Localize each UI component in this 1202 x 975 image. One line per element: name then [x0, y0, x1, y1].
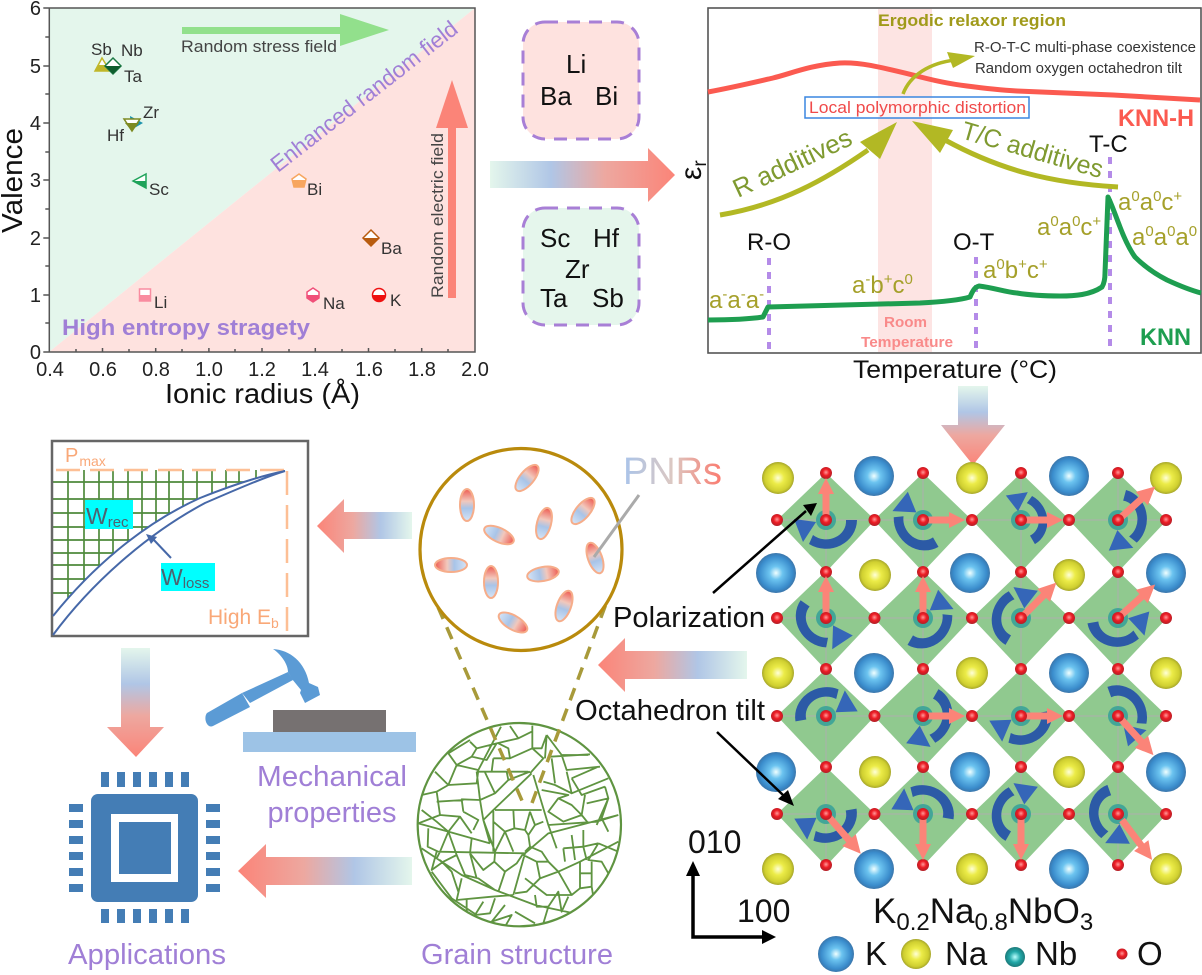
arrow: Wloss pointer — [146, 534, 171, 558]
note: multi-phase coexistence: R-O-T-C multi-phase coexistence — [974, 39, 1196, 56]
element labels — [91, 40, 402, 313]
label: high Eb: High E — [208, 606, 271, 629]
label: KNN: KNN — [1140, 324, 1191, 351]
label: Wloss: loss — [183, 575, 209, 592]
box: B-site additives: Ta — [540, 283, 568, 313]
Glazer tilt notation labels: - — [722, 286, 727, 303]
Glazer tilt notation labels: c — [1027, 257, 1039, 284]
Glazer tilt notation labels: - — [741, 286, 746, 303]
formula: K0.2Na0.8NbO3: NbO — [1008, 892, 1080, 931]
label: polarization: Polarization — [613, 602, 765, 634]
label: Wloss: W — [161, 564, 183, 590]
y axis tick labels: 5 — [30, 56, 41, 78]
label: mechanical properties: properties — [268, 797, 396, 829]
hatched recoverable energy region — [53, 470, 257, 598]
Glazer tilt notation labels — [709, 188, 1197, 314]
Glazer tilt notation labels: c — [1080, 214, 1092, 241]
x axis tick labels: 1.2 — [248, 359, 276, 381]
label: Wrec: rec — [108, 514, 129, 531]
arrow: grain structure to applications — [238, 844, 412, 898]
Glazer tilt notation labels: 0 — [1153, 188, 1161, 205]
axes: crystal directions: 100 — [737, 893, 790, 929]
chart frame — [708, 8, 1201, 353]
legend: atoms: K — [865, 935, 887, 972]
element labels: Ba — [381, 239, 402, 258]
polarization arrows — [818, 478, 1161, 865]
Glazer tilt notation labels: + — [884, 271, 893, 288]
label: octahedron tilt: Octahedron tilt — [575, 695, 765, 727]
legend: atoms — [818, 935, 1163, 972]
Glazer tilt notation labels: + — [1092, 213, 1101, 230]
callout: local polymorphic distortion: Local polymorphic distortion — [809, 98, 1026, 117]
label: enhanced random field: Enhanced random field — [266, 16, 463, 177]
Glazer tilt notation labels: a — [1154, 224, 1168, 251]
oxygen atoms at octahedron vertices — [771, 467, 1172, 871]
box: B-site additives: Sb — [592, 283, 624, 313]
x axis tick labels: 1.0 — [195, 359, 223, 381]
axes: crystal directions — [686, 824, 790, 944]
element labels: K — [390, 291, 402, 310]
formula: K0.2Na0.8NbO3: 0.2 — [896, 909, 930, 936]
panel: PNRs circle — [420, 448, 639, 650]
Glazer tilt notation labels: a — [1037, 214, 1050, 241]
chart frame — [52, 441, 308, 636]
y axis tick labels: 3 — [30, 170, 41, 192]
icon: hammer — [205, 649, 320, 727]
phase transition labels — [747, 131, 1128, 256]
element labels: Sb — [91, 40, 112, 59]
label: T/C additives: T/C additives — [958, 117, 1106, 184]
arrow: lattice to PNRs — [598, 638, 747, 692]
box: B-site additives: Zr — [565, 254, 590, 284]
element labels: Li — [154, 293, 167, 312]
formula: K0.2Na0.8NbO3: 0.8 — [974, 909, 1008, 936]
label: high Eb: b — [271, 615, 279, 631]
y axis tick labels — [30, 0, 41, 364]
phase transition labels: R-O — [747, 229, 791, 256]
pointer line to PNR — [594, 495, 639, 557]
label: PNRs: PNRs — [623, 451, 722, 493]
x axis tick labels — [36, 359, 489, 381]
element labels: Nb — [121, 41, 143, 60]
Glazer tilt notation labels: a — [709, 287, 722, 314]
label: random stress field: Random stress field — [181, 37, 337, 56]
box: A-site additives: Bi — [595, 81, 618, 111]
phase transition labels: O-T — [953, 229, 995, 256]
Glazer tilt notation labels: - — [759, 286, 764, 303]
formula: K0.2Na0.8NbO3: 3 — [1080, 909, 1093, 936]
element labels: Ta — [124, 67, 142, 86]
label: room temperature: Room — [884, 315, 927, 331]
element labels: Na — [323, 294, 345, 313]
panel: grain structure — [418, 723, 621, 927]
Glazer tilt notation labels: + — [1018, 256, 1027, 273]
label: R additives: R additives — [728, 122, 857, 203]
x axis title: temperature: Temperature (°C) — [853, 356, 1057, 384]
x axis tick labels: 1.4 — [301, 359, 329, 381]
arrow: random stress field — [182, 14, 389, 46]
y axis symbol: relative permittivity: ε — [675, 167, 708, 180]
arrow: chart to crystal structure — [941, 386, 1005, 465]
octahedra — [777, 473, 1167, 866]
y axis tick labels: 2 — [30, 228, 41, 250]
phase boundary dashed lines — [769, 157, 1110, 353]
arrow: octahedron tilt pointer — [717, 732, 794, 806]
arrow: T/C additives — [912, 121, 1118, 187]
Glazer tilt notation labels: 0 — [1072, 213, 1080, 230]
panel: permittivity vs temperature chart — [708, 8, 1201, 353]
plot background: random field regions — [49, 8, 475, 352]
formula: K0.2Na0.8NbO3: Na — [930, 892, 975, 931]
Glazer tilt notation labels: 0 — [996, 256, 1005, 273]
hysteresis curves — [53, 471, 285, 635]
Glazer tilt notation labels: a — [727, 287, 741, 314]
label: mechanical properties — [257, 761, 407, 829]
x axis tick labels: 1.6 — [355, 359, 383, 381]
label: grain structure: Grain structure — [421, 939, 613, 971]
x axis title: Ionic radius (Å) — [165, 378, 360, 409]
Glazer tilt notation labels: a — [1175, 224, 1189, 251]
central oxygen atoms — [820, 514, 1124, 820]
arrow: energy chart to applications — [107, 648, 164, 757]
y axis tick labels: 4 — [30, 113, 41, 135]
Glazer tilt notation labels: + — [1173, 188, 1182, 205]
element labels: Sc — [149, 180, 169, 199]
icon: chip — [69, 772, 220, 923]
Glazer tilt notation labels: a — [1140, 189, 1154, 216]
Glazer tilt notation labels: b — [870, 272, 884, 299]
curve: KNN — [708, 197, 1201, 320]
Glazer tilt notation labels: a — [1118, 189, 1131, 216]
octahedron tilt arrows — [784, 482, 1156, 854]
data markers — [95, 58, 386, 302]
label: Wrec — [85, 500, 133, 531]
heading: ergodic relaxor region: Ergodic relaxor region — [878, 11, 1066, 30]
Glazer tilt notation labels: a — [1132, 224, 1145, 251]
y axis tick labels: 1 — [30, 285, 41, 307]
label: Pmax: P — [65, 445, 78, 467]
legend: atoms: Na — [945, 935, 988, 972]
Glazer tilt notation labels: 0 — [1167, 223, 1175, 240]
box: B-site additives: Hf — [593, 223, 620, 253]
room temperature band — [878, 9, 932, 352]
Glazer tilt notation labels: 0 — [1145, 223, 1154, 240]
x axis tick labels: 0.8 — [142, 359, 170, 381]
phase transition labels: T-C — [1089, 131, 1128, 158]
Glazer tilt notation labels: - — [865, 271, 870, 288]
Glazer tilt notation labels: a — [983, 257, 996, 284]
element labels: Zr — [143, 103, 159, 122]
axes: crystal directions: 010 — [688, 824, 741, 860]
plot frame and ticks — [43, 8, 475, 352]
label: room temperature: Temperature — [861, 335, 953, 351]
panel: P-E energy storage chart — [52, 441, 308, 636]
curve: KNN-H — [708, 63, 1200, 100]
panel: valence vs ionic radius scatter plot — [43, 8, 475, 352]
arrow: PNRs to energy chart — [317, 499, 412, 553]
Glazer tilt notation labels: a — [852, 272, 865, 299]
Glazer tilt notation labels: c — [892, 272, 904, 299]
dashed limit lines — [56, 470, 287, 636]
Glazer tilt notation labels: + — [1039, 256, 1048, 273]
label: applications: Applications — [68, 939, 226, 971]
box: A-site additives: Ba — [540, 81, 572, 111]
label: Wrec: W — [86, 503, 108, 529]
box: A-site additives: Li — [566, 49, 586, 79]
arrow: polarization pointer — [713, 503, 817, 593]
box: B-site additives — [523, 208, 639, 325]
polar nanoregions — [435, 461, 607, 637]
arrow: R additives — [720, 122, 897, 215]
Glazer tilt notation labels: a — [1059, 214, 1073, 241]
label: room temperature — [861, 315, 953, 351]
element labels: Hf — [107, 126, 124, 145]
A-site atoms — [756, 456, 1186, 889]
legend: atoms: Nb — [1035, 935, 1077, 972]
y axis symbol: relative permittivity: r — [690, 160, 711, 167]
Glazer tilt notation labels: 0 — [1189, 223, 1197, 240]
zoom lines: grain to PNR circle — [438, 585, 613, 803]
Glazer tilt notation labels: b — [1005, 257, 1018, 284]
legend: atoms: O — [1137, 935, 1163, 972]
Glazer tilt notation labels: 0 — [1131, 188, 1140, 205]
x axis tick labels: 2.0 — [461, 359, 489, 381]
x axis tick labels: 1.8 — [408, 359, 436, 381]
arrow: additives to permittivity chart — [490, 148, 675, 202]
box: B-site additives: Sc — [540, 223, 570, 253]
element labels: Bi — [307, 180, 322, 199]
label: Pmax: max — [79, 453, 106, 469]
Glazer tilt notation labels: 0 — [904, 271, 913, 288]
panel: crystal structure lattice — [756, 456, 1186, 889]
Glazer tilt notation labels: 0 — [1050, 213, 1059, 230]
arrow: random electric field — [436, 80, 468, 298]
arrow: to multi-phase coexistence — [903, 52, 975, 94]
note: random octahedron tilt: Random oxygen octahedron tilt — [975, 60, 1183, 77]
label: KNN-H: KNN-H — [1118, 105, 1194, 132]
sample block on substrate — [243, 710, 416, 752]
formula: K0.2Na0.8NbO3: K — [873, 892, 896, 931]
label: random electric field: Random electric field — [428, 133, 447, 298]
x axis tick labels: 0.6 — [89, 359, 117, 381]
label: mechanical properties: Mechanical — [257, 761, 407, 793]
y axis tick labels: 0 — [30, 342, 41, 364]
label: Wloss — [161, 563, 215, 592]
label: high entropy strategy: High entropy stragety — [62, 315, 311, 340]
x axis tick labels: 0.4 — [36, 359, 64, 381]
Glazer tilt notation labels: a — [746, 287, 760, 314]
Glazer tilt notation labels: c — [1161, 189, 1173, 216]
box: A-site additives — [523, 22, 639, 139]
